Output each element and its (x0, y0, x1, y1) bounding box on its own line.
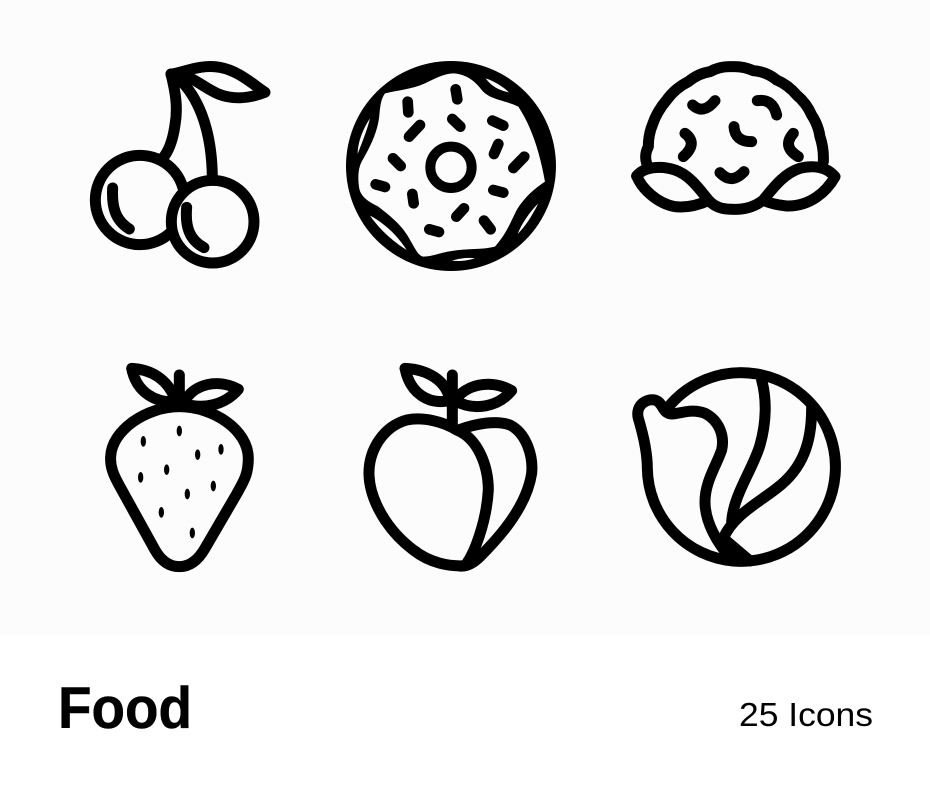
icon: donut (346, 61, 556, 271)
icon: strawberry (111, 368, 248, 567)
icon: peach (369, 368, 532, 566)
icon count label: 25 Icons (739, 696, 873, 733)
icon: cherries (95, 66, 265, 263)
icon: cauliflower (637, 67, 835, 209)
strawberry seeds (138, 426, 224, 538)
title: Food (58, 676, 192, 741)
icon: cabbage (638, 373, 835, 561)
